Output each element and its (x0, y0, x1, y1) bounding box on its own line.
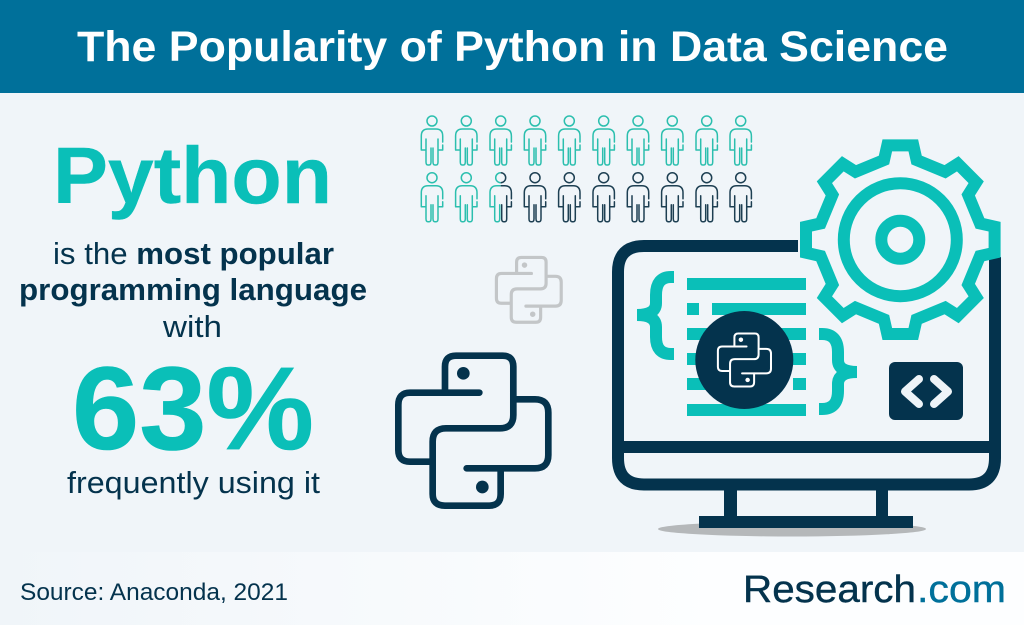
code tag button (889, 362, 963, 420)
source note: Source: Anaconda, 2021 (20, 579, 288, 606)
text: is the most popular: is the most popular (53, 236, 334, 271)
pictogram: people showing 63 percent (421, 116, 751, 222)
text: programming language: programming language (19, 272, 367, 307)
monitor stand (699, 490, 913, 528)
panel: headline statistic text (19, 131, 367, 500)
icon: grey python logo (496, 257, 561, 322)
monitor shadow (658, 522, 926, 536)
left curly brace (637, 277, 674, 354)
icon: large navy python logo (398, 356, 548, 506)
logo: Research.com (743, 569, 1006, 611)
python badge (695, 311, 793, 409)
text: frequently using it: frequently using it (67, 465, 320, 500)
logo: Research.com: .com (917, 569, 1006, 611)
title: The Popularity of Python in Data Science (77, 23, 948, 71)
right curly brace (819, 334, 857, 409)
illustration: computer monitor with code (618, 246, 995, 536)
logo: Research.com: Research (743, 569, 916, 611)
text: with: with (162, 309, 222, 344)
heading: Python: Python (53, 131, 332, 220)
icon: gear (806, 145, 995, 334)
code lines (687, 278, 806, 416)
monitor frame (618, 246, 995, 484)
title banner (0, 0, 1024, 93)
statistic: 63%: 63% (72, 343, 314, 475)
